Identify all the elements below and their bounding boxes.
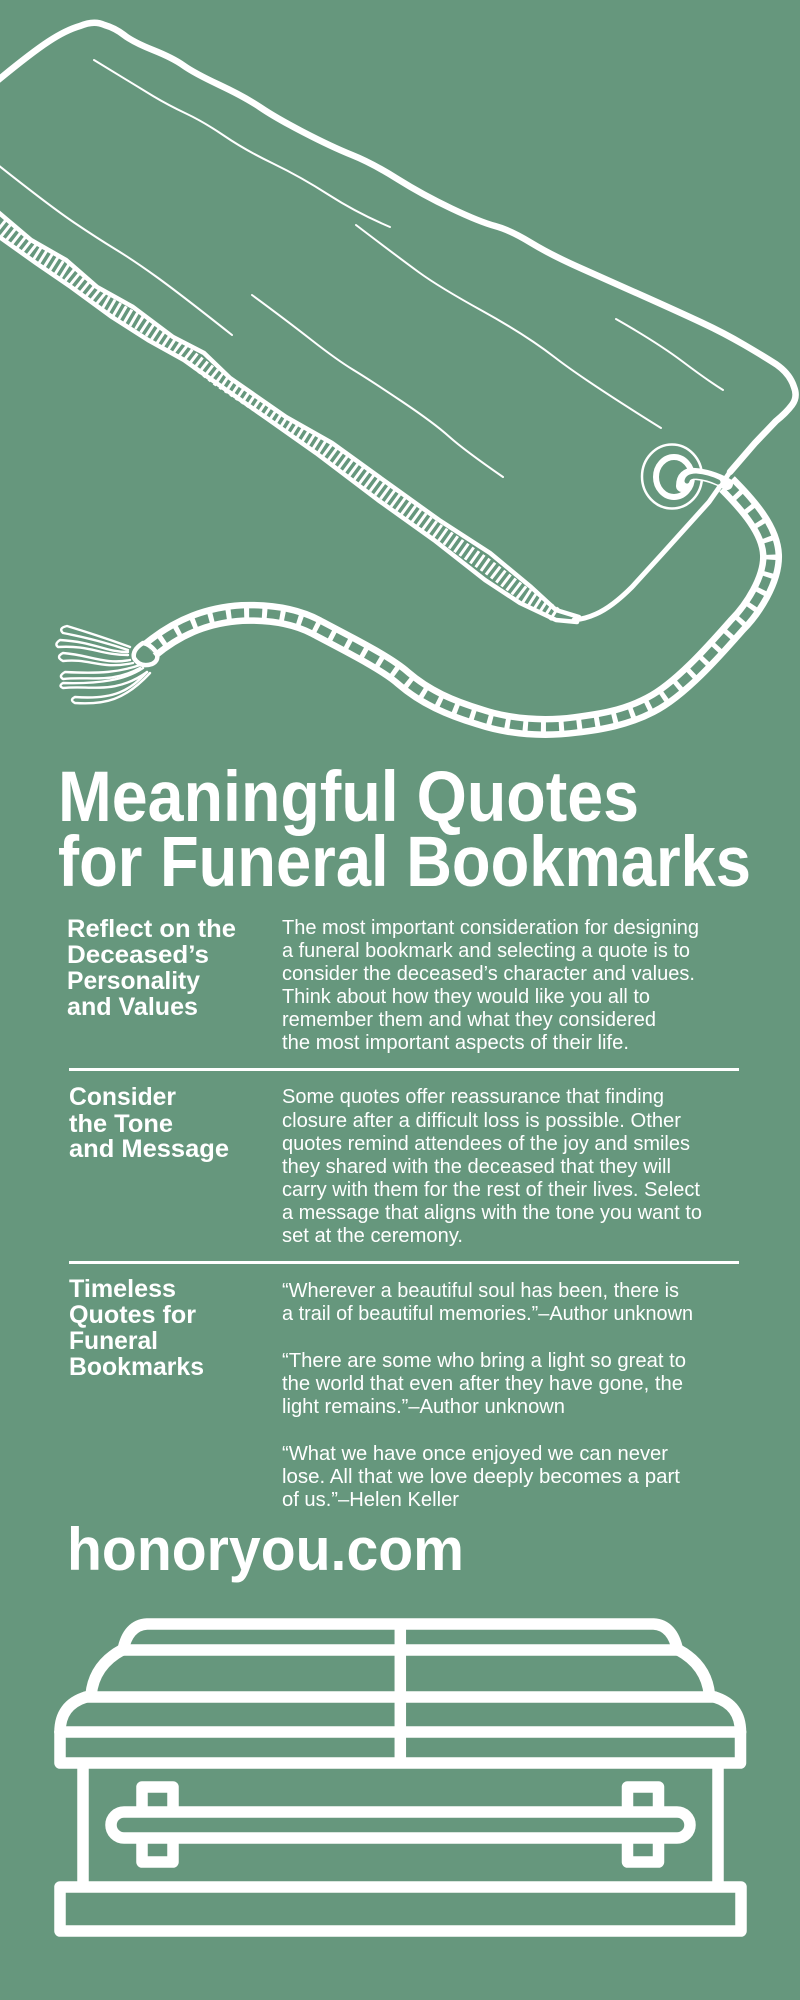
section 1 body (282, 916, 699, 1054)
eyelet ring (642, 444, 702, 508)
quote 2: light remains.”–Author unknown (282, 1395, 565, 1418)
handle brackets (142, 1787, 658, 1862)
website url: honoryou.com (67, 1516, 464, 1583)
illustration: bookmark tag with tassel (0, 23, 796, 727)
section 2 body: a message that aligns with the tone you want to (282, 1201, 702, 1224)
divider (69, 1261, 739, 1264)
section 2 heading (69, 1083, 229, 1163)
quote 3: “What we have once enjoyed we can never (282, 1442, 668, 1465)
section 1 body: The most important consideration for designing (282, 916, 699, 939)
section 3 heading (69, 1275, 204, 1381)
section 2 body: carry with them for the rest of their lives. Select (282, 1178, 700, 1201)
rope string (150, 474, 771, 727)
section 1 heading: Deceased’s (67, 941, 209, 969)
casket base (60, 1887, 741, 1931)
casket body walls (83, 1765, 718, 1885)
section 2 heading: and Message (69, 1135, 229, 1163)
quote 3: lose. All that we love deeply becomes a part (282, 1465, 680, 1488)
section 2 body: quotes remind attendees of the joy and smiles (282, 1132, 690, 1155)
title (58, 758, 751, 902)
quote 2 (282, 1349, 686, 1418)
quote 3: of us.”–Helen Keller (282, 1488, 459, 1511)
bookmark crease lines (0, 60, 723, 477)
quote 1 (282, 1279, 693, 1325)
section 3 heading: Quotes for (69, 1301, 196, 1329)
icon: casket (60, 1624, 741, 1931)
section 2 body (282, 1085, 702, 1247)
tassel knot (134, 643, 157, 665)
section 2 heading: the Tone (69, 1110, 173, 1138)
section 2 body: closure after a difficult loss is possible. Other (282, 1109, 681, 1132)
section 3 heading: Funeral (69, 1327, 158, 1355)
section 1 heading: and Values (67, 993, 198, 1021)
section 2 body: they shared with the deceased that they will (282, 1155, 671, 1178)
section 2 heading: Consider (69, 1083, 176, 1111)
quote 2: “There are some who bring a light so great to (282, 1349, 686, 1372)
section 3 heading: Bookmarks (69, 1353, 204, 1381)
tassel fringe (56, 626, 150, 703)
section 3 quotes (282, 1279, 693, 1511)
section 1 body: consider the deceased’s character and values. (282, 962, 695, 985)
quote 2: the world that even after they have gone, the (282, 1372, 683, 1395)
quote 1: a trail of beautiful memories.”–Author unknown (282, 1302, 693, 1325)
section 1 body: Think about how they would like you all to (282, 985, 650, 1008)
bookmark bottom rope edge (0, 212, 579, 622)
title: Meaningful Quotes (58, 758, 639, 837)
section 1 body: remember them and what they considered (282, 1008, 656, 1031)
casket lid (60, 1624, 740, 1763)
section 1 body: the most important aspects of their life. (282, 1031, 629, 1054)
section 1 body: a funeral bookmark and selecting a quote is to (282, 939, 690, 962)
section 3 heading: Timeless (69, 1275, 176, 1303)
handle bar (111, 1812, 690, 1838)
section 2 body: set at the ceremony. (282, 1224, 463, 1247)
section 1 heading (67, 915, 236, 1021)
quote 3 (282, 1442, 680, 1511)
bookmark outline (0, 23, 796, 620)
section 1 heading: Reflect on the (67, 915, 236, 943)
quote 1: “Wherever a beautiful soul has been, there is (282, 1279, 679, 1302)
section 1 heading: Personality (67, 967, 200, 995)
section 2 body: Some quotes offer reassurance that finding (282, 1085, 664, 1108)
divider (69, 1068, 739, 1071)
